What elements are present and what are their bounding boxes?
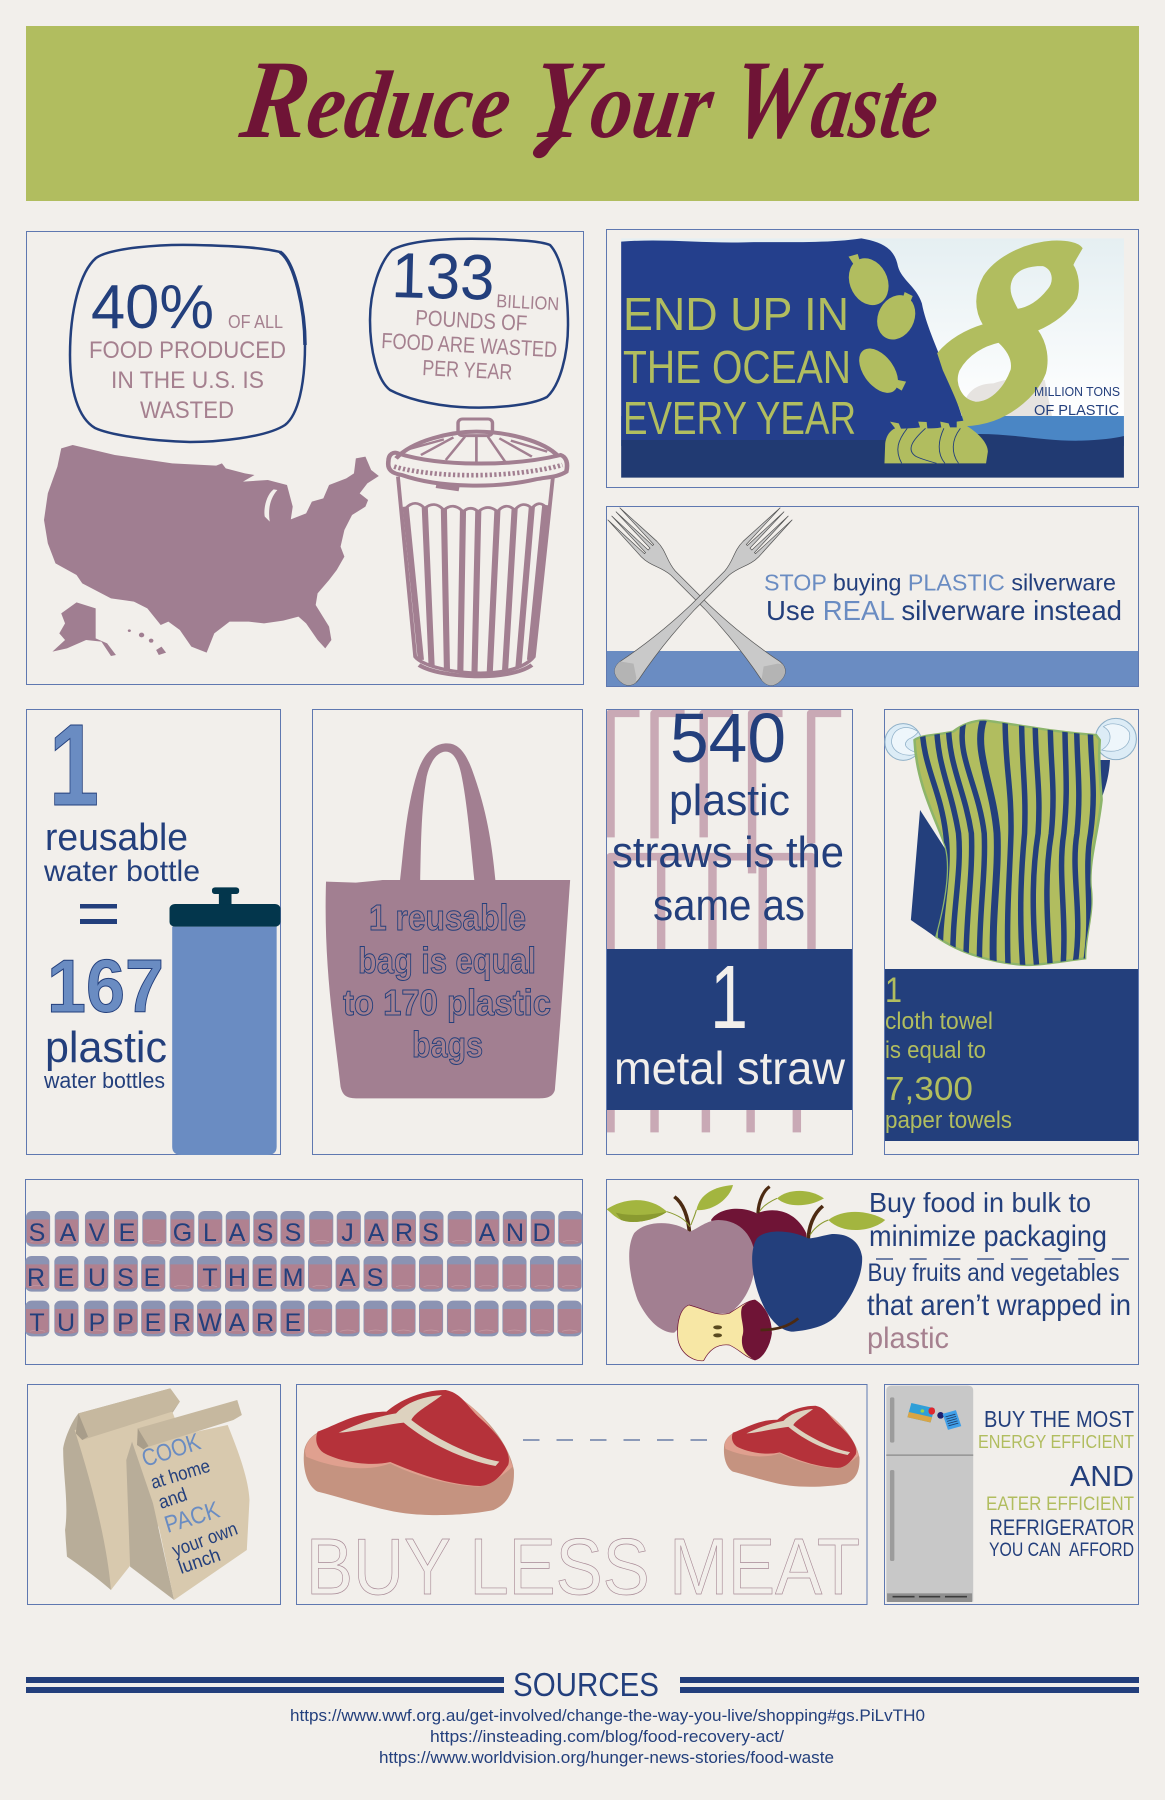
text: straw comparison: same as [653, 881, 805, 930]
label: million tons of plastic: MILLION TONS [1034, 384, 1120, 399]
text: straw comparison [612, 699, 846, 1094]
icon: apples [607, 1185, 885, 1361]
text: straw comparison: straws is the [612, 828, 844, 877]
text: energy efficient refrigerator: AND [1070, 1461, 1134, 1493]
icon: tote bag [326, 743, 570, 1098]
text: straw comparison: 1 [710, 948, 748, 1048]
text: cook at home and pack your own lunch: COOK [139, 1428, 204, 1473]
text: bag comparison [343, 897, 551, 1065]
text: towel comparison: 1 [885, 971, 902, 1010]
text: bottle comparison: plastic [45, 1023, 167, 1072]
text: energy efficient refrigerator: REFRIGERATOR [990, 1515, 1134, 1540]
text: bottle comparison: 1 [49, 700, 99, 830]
text: save glass jars: SAVE GLASS JARS AND [29, 1219, 551, 1247]
panel: ocean plastic [606, 230, 1138, 488]
text: towel comparison: cloth towel [885, 1008, 993, 1035]
heading: end up in the ocean: EVERY YEAR [623, 392, 856, 444]
panel: straws [606, 699, 852, 1154]
panel: buy in bulk [606, 1180, 1138, 1364]
icon: reusable bottle [170, 887, 280, 1155]
text: bottle comparison [43, 700, 200, 1093]
text: bottle comparison: reusable [45, 817, 188, 859]
text: bag comparison: bags [412, 1024, 483, 1065]
text: bottle comparison: 167 [47, 944, 164, 1028]
text: silverware advice: STOP buying PLASTIC silverware [764, 570, 1116, 596]
text: towel comparison: 7,300 [885, 1070, 973, 1107]
icon: rows of jars [25, 1211, 582, 1336]
text: energy efficient refrigerator: BUY THE MOST [984, 1406, 1134, 1432]
text: silverware advice [764, 570, 1122, 626]
panel: paper lunch bags [28, 1384, 280, 1604]
text: save glass jars: TUPPERWARE [29, 1309, 301, 1337]
icon: small steak [724, 1406, 860, 1487]
text: energy efficient refrigerator: EATER EFFICIENT [986, 1494, 1134, 1515]
text: cook at home and pack your own lunch: at home [148, 1456, 213, 1494]
text: silverware advice: Use REAL silverware instead [766, 595, 1122, 626]
illustration: ocean scene [621, 238, 1124, 478]
title: Waste [725, 38, 947, 162]
icon: crossed forks [604, 504, 796, 690]
heading: end up in the ocean: THE OCEAN [623, 341, 851, 393]
icon: trash can [388, 419, 567, 676]
sources section [26, 1666, 1139, 1767]
text: cook at home and pack your own lunch: lunch [176, 1545, 223, 1579]
text: bulk buying advice [867, 1187, 1131, 1355]
text: bottle comparison: water bottle [43, 855, 200, 888]
text: energy efficient refrigerator [978, 1406, 1134, 1561]
title banner [26, 26, 1139, 201]
text: energy efficient refrigerator: YOU CAN AFFORD [989, 1540, 1134, 1561]
text: bag comparison: 1 reusable [369, 897, 526, 938]
text: towel comparison: is equal to [885, 1037, 986, 1064]
text: bulk buying advice: that aren’t wrapped in [867, 1289, 1131, 1322]
text: bulk buying advice: Buy fruits and vegetables [868, 1259, 1120, 1287]
text: cook at home and pack your own lunch: PACK [161, 1497, 223, 1539]
icon: refrigerator [886, 1386, 973, 1602]
icon: large steak [304, 1390, 514, 1515]
label: million tons of plastic: OF PLASTIC [1034, 402, 1119, 419]
text: cook at home and pack your own lunch [139, 1428, 241, 1579]
heading: buy less meat: BUY LESS MEAT [306, 1522, 860, 1611]
cliff [621, 238, 968, 440]
heading: sources: SOURCES [513, 1666, 659, 1703]
icon: US map [44, 445, 379, 656]
text: energy efficient refrigerator: ENERGY EFFICIENT [978, 1432, 1134, 1452]
callout: 133 billion: FOOD ARE WASTED [381, 328, 558, 362]
panel: refrigerator [884, 1384, 1138, 1604]
text: towel comparison [885, 971, 1012, 1134]
icon: plastic straws [611, 713, 841, 1132]
heading: end up in the ocean: END UP IN [623, 288, 849, 340]
callout: 133 billion [370, 239, 568, 408]
text: straw comparison: metal straw [614, 1042, 846, 1094]
source links: https://insteading.com/blog/food-recovery-act/ [430, 1728, 784, 1746]
icon: garbage bags [842, 253, 988, 463]
callout: 133 billion: BILLION [496, 290, 560, 314]
text: save glass jars: REUSE THEM AS [27, 1264, 383, 1292]
title: Reduce [234, 38, 520, 162]
panel: buy less meat [296, 1384, 867, 1611]
text: bulk buying advice: minimize packaging [869, 1220, 1107, 1253]
panel: silverware [604, 504, 1138, 690]
callout: 40 percent: 40% [91, 273, 214, 342]
source links: https://www.wwf.org.au/get-involved/change-the-way-you-live/shopping#gs.PiLvTH0 [290, 1707, 925, 1725]
panel: reusable bag [312, 710, 582, 1154]
callout: 40 percent: IN THE U.S. IS [111, 367, 264, 394]
text: straw comparison: plastic [669, 776, 790, 825]
callout: 40 percent: WASTED [140, 397, 234, 424]
panel: cloth towel [884, 710, 1138, 1154]
text: bag comparison: bag is equal [358, 940, 536, 981]
callout: 40 percent: OF ALL [228, 311, 283, 332]
heading: end up in the ocean [623, 288, 856, 444]
text: bag comparison: to 170 plastic [343, 982, 551, 1023]
text: save glass jars [27, 1219, 551, 1337]
label: million tons of plastic [1034, 384, 1120, 419]
arrow: dashed line between steaks [523, 1439, 707, 1441]
icon: striped towel [885, 718, 1136, 967]
panel: water bottle [26, 700, 280, 1155]
callout: 133 billion: PER YEAR [422, 355, 513, 385]
title: Your [525, 38, 723, 162]
source links [290, 1707, 925, 1767]
text: bulk buying advice: Buy food in bulk to [869, 1187, 1091, 1218]
panel: food waste statistics [26, 232, 584, 684]
text: bottle comparison: water bottles [43, 1068, 165, 1093]
title swash: Y descender [533, 132, 566, 158]
callout: 133 billion: 133 [391, 239, 495, 314]
icon: number 8 [938, 242, 1081, 425]
text: towel comparison: paper towels [885, 1107, 1012, 1134]
text: cook at home and pack your own lunch: your own [170, 1519, 241, 1562]
text: cook at home and pack your own lunch: and [156, 1484, 190, 1514]
callout: 40 percent [70, 245, 305, 442]
callout: 133 billion: POUNDS OF [415, 305, 528, 336]
source links: https://www.worldvision.org/hunger-news-stories/food-waste [379, 1749, 834, 1767]
panel: glass jars [25, 1180, 583, 1364]
text: straw comparison: 540 [670, 699, 786, 777]
icon: paper bags [63, 1388, 249, 1600]
callout: 40 percent: FOOD PRODUCED [89, 337, 286, 364]
title [234, 38, 947, 162]
text: bulk buying advice: plastic [867, 1322, 949, 1355]
